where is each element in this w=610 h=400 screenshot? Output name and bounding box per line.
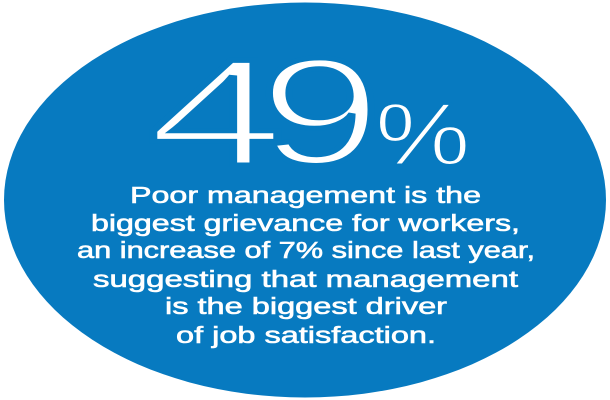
body text block (77, 182, 535, 348)
body text block: Poor management is the (130, 182, 481, 208)
body text block: suggesting that management (93, 266, 519, 292)
headline statistic: 49%: 9 (259, 28, 382, 197)
body text block: an increase of 7% since last year, (77, 237, 535, 263)
body text block: biggest grievance for workers, (91, 210, 520, 236)
headline statistic: 49%: % (375, 85, 470, 183)
headline statistic: 49%: 4 (148, 28, 285, 198)
body text block: of job satisfaction. (176, 322, 436, 348)
headline statistic: 49% (148, 28, 470, 198)
body text block: is the biggest driver (165, 293, 447, 319)
